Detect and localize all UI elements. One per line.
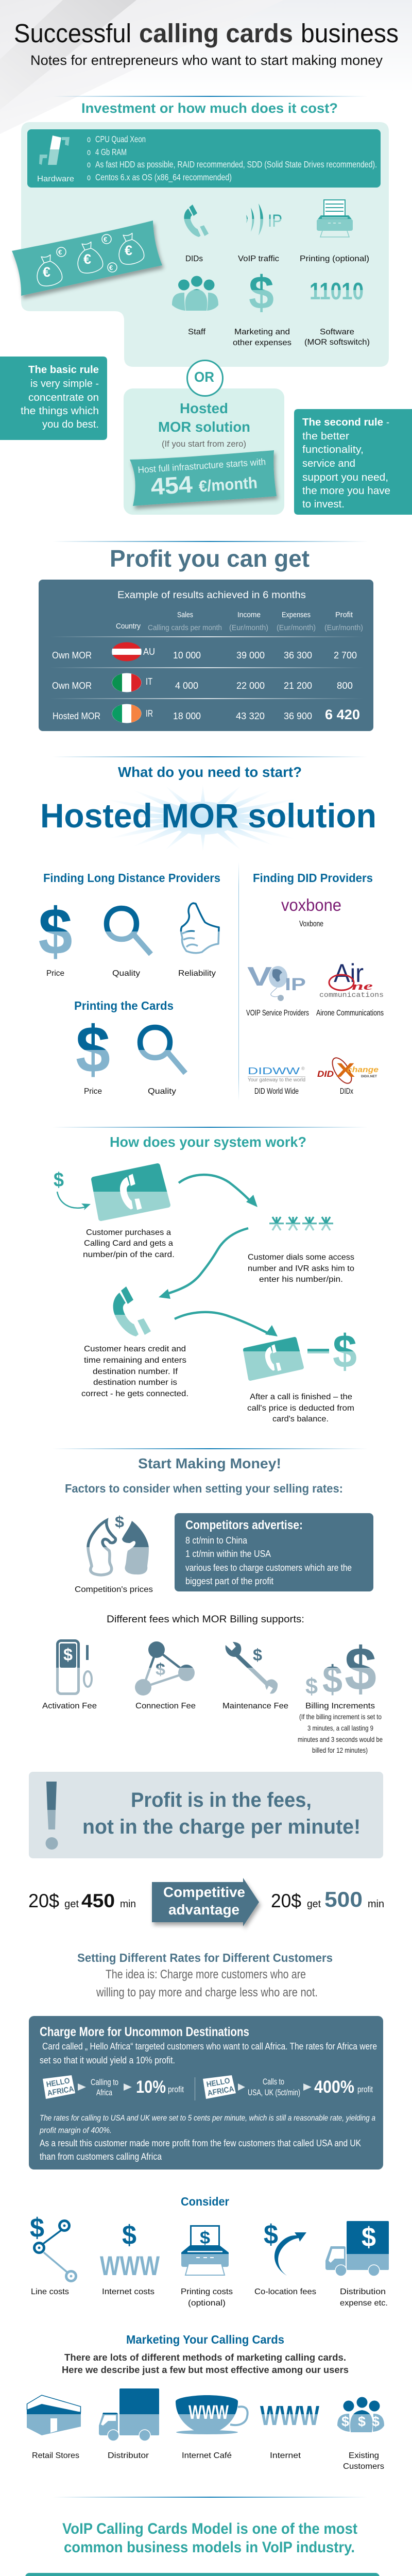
fee: billing increments: billed for 12 minutes) [312, 1746, 368, 1754]
row: IT: Own MOR [52, 681, 92, 691]
heading: start making money: Start Making Money! [138, 1455, 281, 1471]
example: calling USA and UK: 400% [314, 2077, 354, 2097]
table header: (Eur/month) [324, 623, 363, 632]
example: calling Africa: Calling to [91, 2077, 118, 2087]
row: IT: 800 [337, 681, 353, 691]
logo: DIDx: X [336, 1060, 355, 1081]
price ribbon [130, 450, 277, 506]
logo: Airone: Airone Communications [316, 1009, 384, 1018]
comparison: 450 minutes: get [64, 1899, 79, 1910]
text: the idea [96, 1968, 318, 1999]
text: marketing intro: There are lots of different methods of marketing calling cards. [64, 2352, 346, 2363]
fee: billing increments [298, 1635, 383, 1754]
example: calling USA and UK: profit [357, 2084, 373, 2094]
callout: second rule [294, 409, 412, 515]
panel: competitors advertise: 8 ct/min to China [185, 1535, 248, 1546]
icon: print quality: Quality [148, 1087, 176, 1096]
consider: co-location fees [254, 2219, 316, 2296]
panel: competitors advertise: 1 ct/min within the USA [185, 1549, 271, 1559]
logo: DIDWW: DIDWW [248, 1066, 300, 1076]
text: the idea: The idea is: Charge more customers who are [106, 1968, 306, 1981]
hardware list: Centos 6.x as OS (x86_64 recommended) [95, 172, 232, 183]
example: calling Africa [43, 2075, 184, 2099]
fee: activation [42, 1640, 97, 1710]
arrow: step 2 to 3 [159, 1228, 248, 1299]
text: marketing intro [62, 2352, 349, 2375]
fee: billing increments: 3 minutes, a call lasting 9 [307, 1724, 373, 1732]
divider 6 [53, 2497, 368, 2498]
heading: different fees: Different fees which MOR Billing supports: [107, 1614, 304, 1625]
background decoration top [0, 0, 412, 134]
heading: conclusion: VoIP Calling Cards Model is one of the most [62, 2520, 357, 2537]
ribbon with money bags: € [43, 264, 50, 280]
callout: second rule: the better [302, 431, 349, 442]
logo: Airone: communications [319, 991, 384, 999]
comparison: 450 minutes: 20$ [28, 1890, 59, 1911]
arrow: competitive advantage: advantage [168, 1902, 239, 1918]
logo: Airone: ne [352, 979, 373, 992]
logo: VOIP service providers: VOIP Service Providers [246, 1009, 309, 1018]
row: IT: 21 200 [284, 681, 312, 691]
comparison: 450 minutes: min [120, 1899, 136, 1910]
hardware list [87, 134, 377, 183]
cost item: staff: Staff [188, 328, 206, 336]
arrow: step 3 to 4 [175, 1312, 278, 1336]
consider: distribution: $ [362, 2222, 376, 2252]
cost item: software: 11010 [310, 278, 364, 304]
consider: distribution: expense etc. [340, 2299, 388, 2308]
row: IT: 4 000 [175, 681, 198, 691]
row: AU: 10 000 [173, 650, 201, 660]
divider 1 [53, 96, 368, 97]
heading: marketing your calling cards: Marketing Your Calling Cards [126, 2333, 284, 2346]
fee: activation: $ [63, 1645, 73, 1664]
fee: maintenance: $ [253, 1646, 262, 1664]
callout: second rule: the more you have [302, 485, 390, 497]
example: calling Africa: Africa [96, 2088, 112, 2097]
panel: charge more for uncommon destinations [29, 2016, 383, 2170]
marketing: internet cafe: Internet Café [182, 2451, 232, 2460]
table header: Country [116, 622, 141, 631]
price ribbon: 454 [150, 470, 194, 500]
step 4: balance deducted: $ [333, 1326, 357, 1378]
arrow: competitive advantage: Competitive [163, 1884, 245, 1900]
hardware list: o [87, 172, 91, 182]
cost item: VoIP traffic: IP [268, 211, 282, 231]
explanation text: As a result this customer made more profit from the few customers that called USA and UK [40, 2138, 361, 2148]
cost item: VoIP traffic: VoIP traffic [238, 255, 279, 263]
comparison: 500 minutes [271, 1887, 384, 1911]
icon: reliability [178, 903, 219, 978]
row: AU: 39 000 [236, 650, 265, 660]
text: the idea: willing to pay more and charge less who are not. [96, 1986, 318, 1999]
step 2: dial pin: enter his number/pin. [259, 1275, 343, 1284]
callout: basic rule: is very simple - [30, 378, 99, 389]
ribbon with money bags: € [58, 248, 62, 256]
example: calling Africa: 10% [136, 2077, 166, 2097]
callout: second rule: The second rule [302, 417, 383, 428]
panel: competitors advertise: various fees to charge customers which are the [185, 1563, 352, 1573]
section: DID providers [246, 871, 384, 1096]
consider: printing costs: $ [200, 2228, 210, 2248]
headline: hosted MOR solution: Hosted MOR solution [40, 796, 376, 835]
panel: charge more for uncommon destinations: Charge More for Uncommon Destinations [40, 2025, 249, 2039]
icon: competition's prices: Competition's prices [75, 1585, 153, 1594]
callout: basic rule: the things which [21, 405, 99, 417]
step 2: dial pin: Customer dials some access [248, 1253, 354, 1262]
sub-heading: factors: Factors to consider when setting your selling rates: [65, 1482, 343, 1495]
icon: price: Price [46, 969, 64, 978]
step 2: dial pin: number and IVR asks him to [248, 1264, 354, 1273]
icon: competition's prices: $ [115, 1513, 124, 1531]
comparison: 500 minutes: get [307, 1899, 321, 1910]
hardware list: o [87, 134, 91, 144]
logo: VOIP service providers [246, 962, 309, 1018]
marketing: internet [260, 2400, 319, 2460]
comparison: 450 minutes: 450 [81, 1890, 115, 1911]
ribbon with money bags: € [109, 264, 113, 272]
hardware list: o [87, 147, 91, 157]
step 4: balance deducted: card's balance. [272, 1415, 329, 1423]
section: printing the cards [74, 999, 185, 1096]
logo: voxbone: voxbone [281, 895, 341, 914]
message: Profit is in the fees, [131, 1789, 312, 1811]
hardware list: o [87, 159, 91, 170]
hosted heading: Hosted [180, 400, 228, 416]
logo: Airone: Air [334, 959, 364, 988]
fee: activation: Activation Fee [42, 1702, 97, 1710]
step 4: balance deducted: After a call is finished – the [250, 1393, 352, 1401]
consider: printing costs: Printing costs [181, 2287, 233, 2296]
heading: conclusion: common business models in VoIP industry. [64, 2539, 355, 2556]
example: calling USA and UK: AFRICA [207, 2084, 235, 2098]
fee: maintenance: Maintenance Fee [222, 1702, 288, 1710]
arrow: step 1 to 2 [179, 1175, 258, 1207]
panel: profit is in the fees [29, 1772, 383, 1858]
row: IT [52, 673, 353, 692]
table header: Income [237, 611, 261, 619]
logo: DIDWW: Your gateway to the world [248, 1077, 305, 1083]
price ribbon: €/month [198, 473, 258, 496]
explanation text: profit margin of 400%. [39, 2126, 112, 2135]
consider: internet costs: WWW [100, 2251, 160, 2281]
logo: voxbone [281, 895, 341, 928]
heading: investment: Investment or how much does it cost? [81, 100, 338, 116]
callout: basic rule: The basic rule [28, 364, 99, 376]
cost item: marketing [233, 267, 291, 347]
step 3: enter destination: Customer hears credit and [84, 1345, 186, 1353]
consider: printing costs [181, 2226, 233, 2308]
row: IR: 6 420 [325, 707, 360, 722]
cost item: DIDs [184, 205, 209, 263]
cost item: marketing: other expenses [233, 338, 291, 347]
icon: quality: Quality [112, 969, 140, 978]
consider: co-location fees: $ [264, 2219, 278, 2250]
section: long distance providers [38, 871, 220, 978]
cost item: marketing: Marketing and [234, 328, 290, 336]
step 4: balance deducted: call's price is deducted from [247, 1404, 354, 1413]
consider: internet costs: Internet costs [102, 2287, 154, 2296]
table header: Expenses [282, 611, 311, 619]
table header: (Eur/month) [229, 623, 268, 632]
marketing: retail stores [27, 2395, 81, 2460]
panel: competitors advertise: Competitors advertise: [185, 1518, 303, 1532]
hosted note: (If you start from zero) [162, 439, 246, 449]
callout: second rule: - [386, 417, 389, 428]
fee: billing increments: $ [305, 1674, 318, 1699]
panel: hardware [27, 129, 381, 188]
divider 2 [53, 541, 368, 542]
example: calling Africa: HELLO [46, 2076, 71, 2089]
row: AU: 2 700 [334, 650, 357, 660]
hardware list: 4 Gb RAM [95, 147, 127, 157]
ribbon with money bags: € [104, 235, 107, 243]
step 1: purchase card: Customer purchases a [86, 1228, 171, 1237]
callout: second rule: to invest. [302, 499, 345, 510]
explanation text: than from customers calling Africa [40, 2151, 162, 2162]
divider 5 [53, 1448, 368, 1449]
row: AU [52, 642, 357, 662]
row: AU: Own MOR [52, 650, 92, 660]
table header: Sales [177, 611, 193, 619]
row: IR: IR [146, 708, 153, 719]
marketing: internet cafe: WWW [188, 2402, 229, 2424]
text: marketing intro: Here we describe just a few but most effective among our users [62, 2365, 349, 2375]
panel: competitors advertise [175, 1513, 373, 1591]
row: IR: Hosted MOR [53, 711, 100, 721]
consider: distribution [325, 2221, 389, 2308]
comparison: 500 minutes: 20$ [271, 1890, 301, 1911]
hardware list: CPU Quad Xeon [95, 134, 146, 144]
comparison: 500 minutes: 500 [324, 1887, 363, 1911]
arrow: competitive advantage [152, 1878, 259, 1926]
logo: DIDWW [248, 1066, 305, 1096]
consider: line costs: $ [30, 2213, 44, 2243]
table header [116, 611, 363, 632]
logo: DIDx [317, 1055, 379, 1096]
sub-heading: Finding Long Distance Providers [43, 871, 220, 885]
table title: Example of results achieved in 6 months [117, 590, 306, 601]
vertical divider [238, 862, 239, 1101]
panel: the essence [25, 2573, 380, 2576]
callout: basic rule [0, 357, 107, 440]
fee: billing increments: $ [322, 1658, 342, 1701]
table header: Calling cards per month [148, 623, 222, 632]
consider: distribution: Distribution [340, 2287, 386, 2296]
icon: reliability: Reliability [178, 969, 216, 978]
fee: connection: $ [156, 1660, 165, 1679]
fee: maintenance [222, 1642, 288, 1710]
logo: VOIP service providers: IP [285, 975, 306, 994]
panel: profit table [39, 580, 373, 731]
heading: setting different rates: Setting Different Rates for Different Customers [77, 1951, 333, 1964]
title: calling cards [139, 19, 293, 48]
label: hardware: Hardware [37, 175, 74, 183]
callout: second rule: service and [302, 458, 355, 469]
hosted heading: MOR solution [158, 419, 250, 435]
fee: billing increments: $ [345, 1635, 376, 1703]
panel: own infrastructure costs [12, 122, 389, 367]
logo: DIDx: DIDX.NET [361, 1075, 377, 1078]
row: IT: 22 000 [236, 681, 265, 691]
sub-heading: Finding DID Providers [253, 871, 373, 885]
marketing: internet: Internet [270, 2451, 301, 2460]
icon: print price: $ [76, 1013, 110, 1087]
sub-heading: Printing the Cards [74, 999, 174, 1012]
step 2: dial pin [248, 1217, 354, 1284]
icon: competition's prices [75, 1513, 153, 1594]
logo: VOIP service providers: V [247, 962, 272, 992]
logo: DIDWW: ® [301, 1066, 305, 1071]
cost item: printing: Printing (optional) [300, 255, 369, 263]
decorative starburst [67, 785, 340, 851]
example: calling USA and UK: USA, UK (5ct/min) [248, 2088, 300, 2097]
consider: line costs [30, 2213, 76, 2296]
panel: hosted MOR solution [124, 361, 284, 515]
logo: DIDx: change [347, 1065, 379, 1074]
price ribbon: Host full infrastructure starts with [138, 456, 266, 475]
cost item: VoIP traffic [238, 204, 282, 263]
intro text [40, 2041, 377, 2065]
OR badge [187, 361, 222, 396]
heading: consider: Consider [181, 2195, 229, 2208]
fee: billing increments: minutes and 3 seconds would be [298, 1735, 383, 1743]
marketing: existing customers: Existing [349, 2451, 379, 2460]
cost item: software [304, 278, 370, 347]
step 4: balance deducted [245, 1326, 357, 1423]
cost item: staff [172, 276, 218, 336]
icon: quality [107, 908, 151, 978]
marketing: distributor [99, 2388, 159, 2460]
consider: co-location fees: Co-location fees [254, 2287, 316, 2296]
table header: (Eur/month) [277, 623, 316, 632]
cost item: DIDs: DIDs [185, 255, 203, 263]
step 1: purchase card [54, 1166, 175, 1259]
row: IT: IT [146, 676, 152, 687]
row: IR [53, 704, 360, 723]
title: business [301, 19, 399, 48]
title: Successful [14, 19, 131, 48]
row: IR: 36 900 [284, 711, 312, 721]
marketing: internet: WWW [260, 2400, 319, 2431]
cost item: software: (MOR softswitch) [304, 338, 370, 347]
example: calling USA and UK: HELLO [206, 2076, 231, 2089]
marketing: existing customers: Customers [343, 2462, 384, 2471]
marketing: existing customers: $ [341, 2414, 349, 2429]
step 1: purchase card: $ [54, 1169, 64, 1191]
comparison: 500 minutes: min [368, 1899, 384, 1910]
heading: how does your system work: How does your system work? [110, 1134, 306, 1150]
message: not in the charge per minute! [82, 1816, 360, 1838]
step 3: enter destination: correct - he gets connected. [81, 1389, 188, 1398]
fee: billing increments: Billing Increments [305, 1702, 375, 1710]
cost item: software: Software [320, 328, 354, 336]
icon: price: $ [38, 895, 72, 969]
marketing: existing customers: $ [358, 2414, 366, 2429]
icon: print quality [140, 1027, 185, 1096]
consider: internet costs [100, 2220, 160, 2296]
fee: connection: Connection Fee [135, 1702, 196, 1710]
logo: Airone [316, 959, 384, 1018]
consider: line costs: Line costs [31, 2287, 69, 2296]
step 3: enter destination: time remaining and enters [84, 1356, 186, 1365]
hosted heading [158, 400, 250, 435]
intro text: set so that it would yield a 10% profit. [40, 2055, 175, 2065]
example: calling USA and UK: Calls to [263, 2077, 284, 2087]
fee: billing increments: (If the billing increment is set to [299, 1713, 382, 1721]
marketing: retail stores: Retail Stores [32, 2451, 79, 2460]
ribbon with money bags: € [83, 251, 91, 267]
heading: profit: Profit you can get [110, 545, 310, 572]
flow diagram [54, 1166, 357, 1423]
title [14, 19, 399, 48]
row: AU: AU [143, 647, 155, 657]
step 1: purchase card: number/pin of the card. [83, 1250, 175, 1259]
heading: conclusion [62, 2520, 357, 2556]
callout: basic rule: you do best. [42, 419, 99, 430]
example: calling USA and UK [203, 2075, 373, 2099]
divider 4 [53, 1127, 368, 1128]
step 3: enter destination: destination number is [93, 1378, 177, 1387]
example: calling Africa: profit [168, 2084, 184, 2094]
icon: exclamation mark [45, 1782, 58, 1850]
message [82, 1789, 360, 1838]
divider 3 [53, 756, 368, 757]
consider: internet costs: $ [122, 2220, 136, 2250]
ribbon with money bags [12, 221, 162, 296]
logo: DIDx: DID [317, 1069, 334, 1079]
cost item: printing [300, 200, 369, 263]
row: IR: 43 320 [236, 711, 265, 721]
OR badge: OR [194, 369, 214, 385]
logo: DIDWW: DID World Wide [254, 1087, 299, 1096]
table header: Profit [335, 611, 353, 619]
icon: print price: Price [84, 1087, 102, 1096]
panel: competitors advertise: biggest part of the profit [185, 1576, 273, 1586]
marketing: existing customers [337, 2397, 384, 2471]
step 3: enter destination [81, 1286, 188, 1398]
logo: DIDx: DIDx [340, 1087, 353, 1096]
marketing: distributor: Distributor [108, 2451, 149, 2460]
row: IR: 18 000 [173, 711, 201, 721]
fee: connection [135, 1641, 196, 1710]
callout: second rule: support you need, [302, 472, 388, 483]
explanation text [39, 2114, 375, 2162]
icon: RAM stick [39, 135, 70, 165]
marketing: internet cafe [176, 2395, 248, 2460]
ribbon with money bags: € [125, 243, 132, 258]
heading: what do you need: What do you need to start? [118, 764, 302, 780]
callout: second rule: functionality, [302, 444, 364, 455]
step 3: enter destination: destination number. If [93, 1367, 178, 1376]
subtitle: Notes for entrepreneurs who want to start making money [30, 53, 383, 68]
example: calling Africa: AFRICA [47, 2084, 75, 2098]
consider: printing costs: (optional) [188, 2299, 226, 2308]
comparison: 450 minutes [28, 1890, 136, 1911]
callout: basic rule: concentrate on [28, 392, 99, 403]
row: AU: 36 300 [284, 650, 312, 660]
step 1: purchase card: Calling Card and gets a [84, 1239, 173, 1248]
cost item: marketing: $ [249, 267, 274, 319]
marketing: existing customers: $ [372, 2414, 380, 2429]
logo: voxbone: Voxbone [299, 920, 323, 928]
